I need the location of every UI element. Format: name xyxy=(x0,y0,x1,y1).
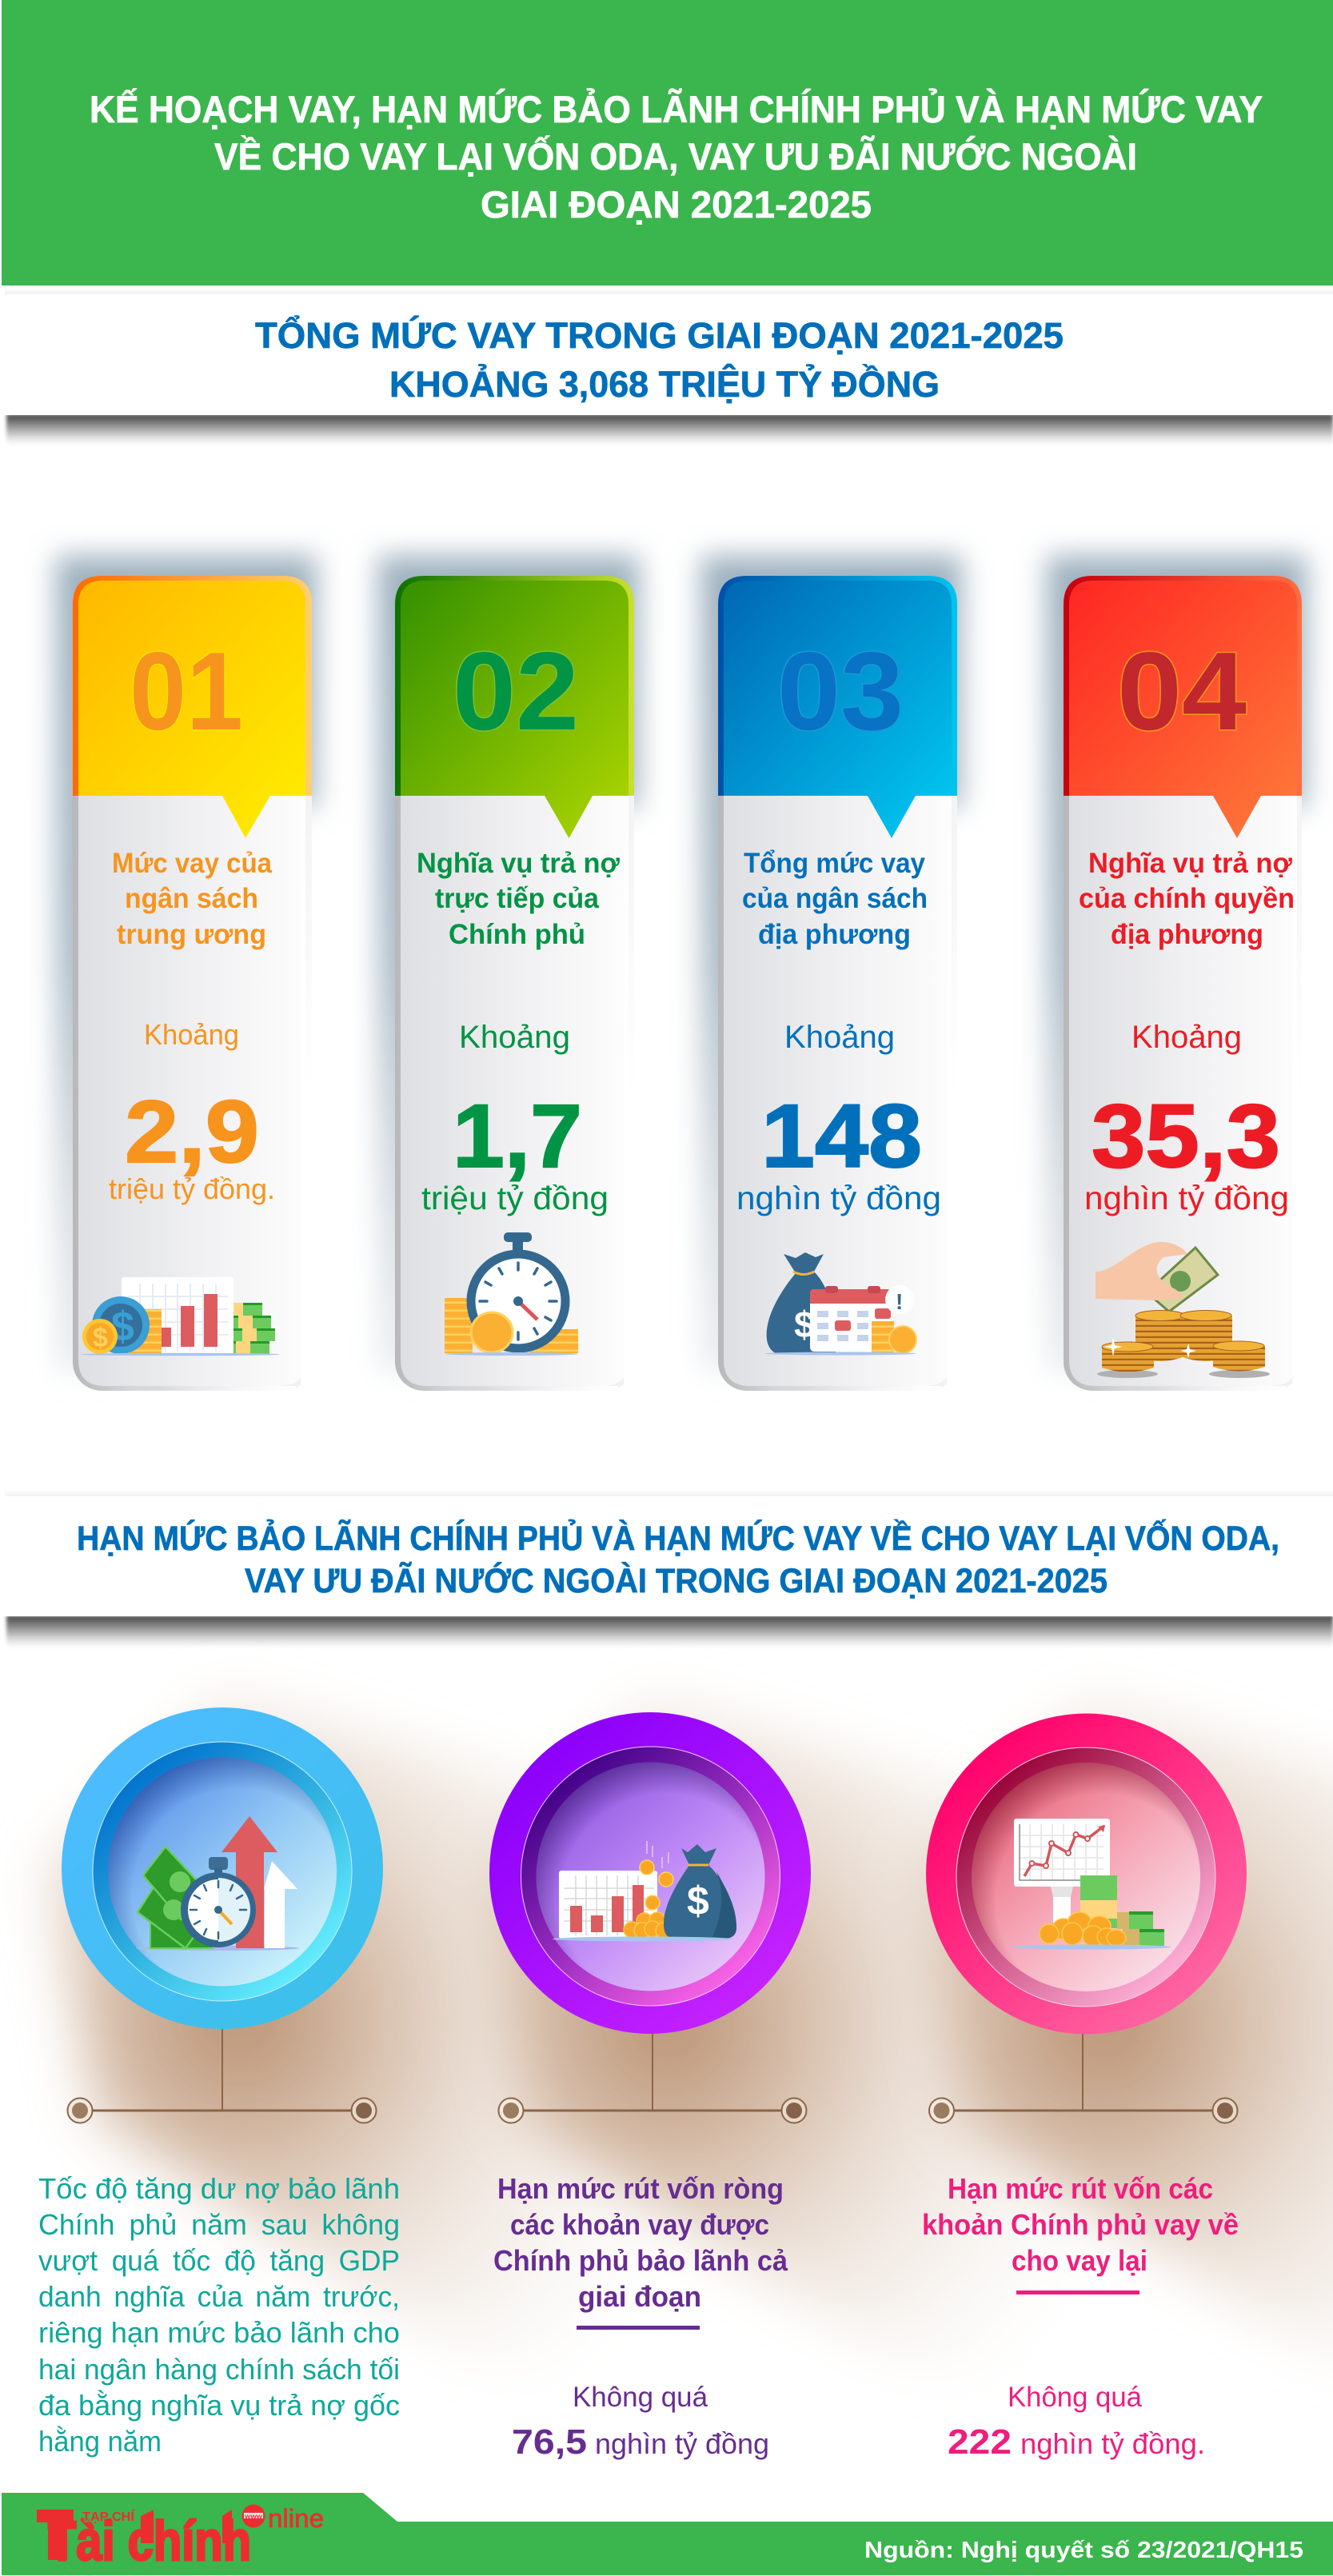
text: column 2 xyxy=(493,2172,788,2462)
amount: Khoảng xyxy=(784,1020,895,1055)
column 3 heading: khoản Chính phủ vay về xyxy=(922,2208,1239,2241)
banner heading: VAY ƯU ĐÃI NƯỚC NGOÀI TRONG GIAI ĐOẠN 2021-2025 xyxy=(245,1561,1108,1600)
panel: card 04 xyxy=(1047,556,1307,1396)
column 3 value: 222 xyxy=(948,2422,1012,2462)
card title: Mức vay của xyxy=(112,848,272,879)
amount xyxy=(1084,1020,1289,1216)
panel: column 2 circle xyxy=(489,1712,811,2123)
column 2 heading: Chính phủ bảo lãnh cả xyxy=(493,2244,788,2277)
amount: 1,7 xyxy=(453,1086,582,1186)
number 03: 03 xyxy=(777,629,904,753)
panel: card 01 xyxy=(56,556,317,1396)
card title: địa phương xyxy=(1111,919,1263,950)
text: column 3 xyxy=(922,2172,1239,2462)
card title: Nghĩa vụ trả nợ xyxy=(417,848,620,879)
amount: triệu tỷ đồng xyxy=(421,1180,609,1216)
panel: column 1 circle xyxy=(62,1707,383,2123)
banner: total borrowing xyxy=(0,288,1333,445)
card title: Tổng mức vay xyxy=(744,848,926,879)
column 2 value: nghìn tỷ đồng xyxy=(595,2427,769,2460)
text: column 1 paragraph: Chính phủ năm sau không xyxy=(38,2208,400,2241)
column 2 value: 76,5 xyxy=(512,2422,587,2462)
column 3 heading: Hạn mức rút vốn các xyxy=(948,2172,1213,2205)
source: Nguồn: Nghị quyết số 23/2021/QH15 xyxy=(864,2538,1303,2563)
title xyxy=(90,88,1263,226)
amount xyxy=(421,1020,609,1216)
circle shadows xyxy=(48,1695,1333,2485)
card title: ngân sách xyxy=(125,883,258,914)
connector xyxy=(929,2034,1238,2123)
icon: coins, bar chart, money: $ xyxy=(93,1323,108,1353)
card title xyxy=(1079,848,1295,950)
amount: triệu tỷ đồng. xyxy=(109,1172,275,1205)
amount: 2,9 xyxy=(125,1083,259,1181)
text: column 3: Không quá xyxy=(1008,2382,1143,2413)
amount: 148 xyxy=(761,1086,922,1186)
card title xyxy=(417,848,620,950)
title: KẾ HOẠCH VAY, HẠN MỨC BẢO LÃNH CHÍNH PHỦ VÀ HẠN MỨC VAY xyxy=(90,88,1263,130)
banner heading: TỔNG MỨC VAY TRONG GIAI ĐOẠN 2021-2025 xyxy=(255,315,1064,356)
card title: của chính quyền xyxy=(1079,883,1295,914)
column 3 heading xyxy=(922,2172,1239,2277)
text: column 1 paragraph: Tốc độ tăng dư nợ bảo lãnh xyxy=(38,2172,400,2205)
column 2 heading: các khoản vay được xyxy=(510,2208,769,2241)
text: column 2: Không quá xyxy=(573,2382,708,2413)
text: column 1 paragraph: riêng hạn mức bảo lãnh cho xyxy=(38,2316,400,2349)
banner heading: KHOẢNG 3,068 TRIỆU TỶ ĐỒNG xyxy=(389,364,940,405)
banner heading xyxy=(255,315,1064,405)
amount xyxy=(736,1020,941,1216)
card title xyxy=(112,848,272,950)
panel: column 3 circle xyxy=(926,1713,1247,2123)
card title: trung ương xyxy=(117,919,266,950)
title: VỀ CHO VAY LẠI VỐN ODA, VAY ƯU ĐÃI NƯỚC NGOÀI xyxy=(214,135,1137,178)
icon: chart, coins, money bag xyxy=(553,1841,736,1942)
text: column 1 paragraph xyxy=(38,2172,400,2458)
amount: 35,3 xyxy=(1092,1086,1280,1186)
amount xyxy=(109,1018,275,1205)
column 3 heading: cho vay lại xyxy=(1012,2244,1147,2277)
card title xyxy=(742,848,928,950)
banner heading xyxy=(77,1519,1279,1600)
title: GIAI ĐOẠN 2021-2025 xyxy=(481,183,872,226)
column 2 value xyxy=(512,2422,769,2462)
column 2 heading: Hạn mức rút vốn ròng xyxy=(497,2172,784,2205)
footer band xyxy=(2,2493,1333,2575)
panel: card 03 xyxy=(701,556,962,1396)
card title: trực tiếp của xyxy=(435,883,600,914)
text: column 1 paragraph: đa bằng nghĩa vụ trả nợ gốc xyxy=(38,2389,400,2422)
card title: địa phương xyxy=(758,919,911,950)
connector xyxy=(67,2028,376,2123)
logo: TẠP CHÍ xyxy=(82,2509,135,2524)
icon: money bag and calendar: ! xyxy=(896,1289,903,1314)
icon: line chart, money, coins xyxy=(1011,1819,1171,1950)
amount: Khoảng xyxy=(1131,1020,1242,1055)
column 3 value xyxy=(948,2422,1205,2462)
connector xyxy=(499,2034,806,2123)
amount: nghìn tỷ đồng xyxy=(736,1180,941,1216)
text: column 1 paragraph: hai ngân hàng chính sách tối xyxy=(38,2353,400,2386)
icon: coins, bar chart, money xyxy=(82,1277,280,1356)
icon: money bag and calendar xyxy=(764,1252,916,1355)
logo: Tài chính xyxy=(48,2510,251,2572)
header band xyxy=(2,0,1333,286)
column 2 heading xyxy=(493,2172,788,2313)
banner: limits xyxy=(0,1490,1333,1647)
number 04: 04 xyxy=(1117,629,1247,753)
text: column 1 paragraph: vượt quá tốc độ tăng GDP xyxy=(38,2244,400,2277)
amount: Khoảng xyxy=(459,1020,570,1055)
logo: www xyxy=(244,2513,263,2520)
text: column 1 paragraph: hằng năm xyxy=(38,2425,162,2458)
amount: Khoảng xyxy=(144,1018,239,1051)
icon: coins, bar chart, money: $ xyxy=(111,1304,134,1350)
number 02: 02 xyxy=(453,629,579,753)
card title: của ngân sách xyxy=(742,883,928,914)
icon: hand, banknote, coin stacks xyxy=(1096,1242,1270,1378)
column 2 heading: giai đoạn xyxy=(578,2280,701,2313)
icon: money, stopwatch, arrows xyxy=(136,1816,299,1951)
card title: Nghĩa vụ trả nợ xyxy=(1088,848,1292,879)
column 3 value: nghìn tỷ đồng. xyxy=(1020,2427,1205,2460)
icon: money bag and calendar: $ xyxy=(794,1304,815,1345)
card title: Chính phủ xyxy=(449,919,585,950)
number 01: 01 xyxy=(130,629,243,753)
text: column 1 paragraph: danh nghĩa của năm trước, xyxy=(38,2280,400,2313)
panel: card 02 xyxy=(378,556,639,1396)
logo: nline xyxy=(268,2504,324,2533)
icon: stopwatch and coins xyxy=(445,1232,578,1356)
amount: nghìn tỷ đồng xyxy=(1084,1180,1289,1216)
icon: chart, coins, money bag: $ xyxy=(687,1879,709,1923)
